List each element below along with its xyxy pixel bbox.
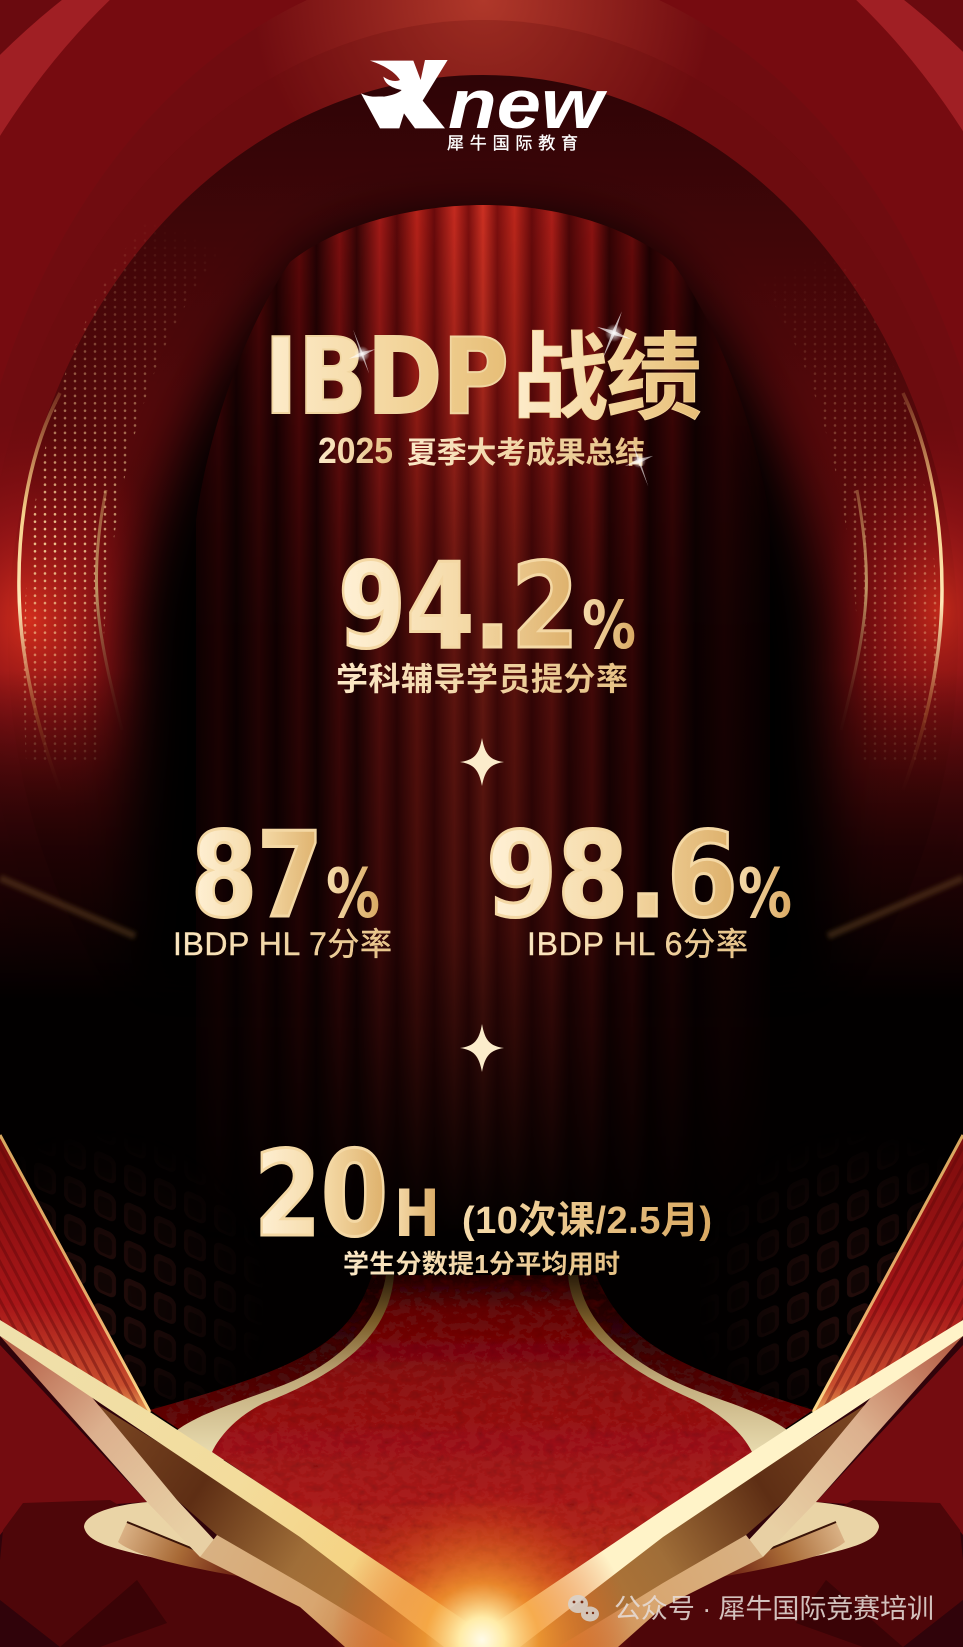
percent sign: % — [582, 587, 636, 664]
logo word new: new — [448, 65, 608, 143]
gold ring lines — [19, 393, 942, 790]
gold V frame — [0, 1320, 963, 1647]
subtitle — [318, 430, 645, 471]
logo: Xnew — [361, 60, 608, 153]
title sparkles — [340, 305, 662, 492]
faint side rails — [0, 878, 963, 936]
stat: 98.6% — [486, 806, 792, 962]
label: 公众号 · 犀牛国际竞赛培训 — [614, 1594, 934, 1624]
value: 87 — [191, 806, 323, 944]
stat: 87% — [173, 806, 392, 962]
stage curtain — [130, 205, 832, 1290]
title: IBDP — [264, 316, 509, 438]
subtitle: 2025 — [318, 430, 393, 471]
right stage decoration: seats, red wing, cream frame — [513, 1120, 963, 1647]
unit: H — [394, 1177, 440, 1252]
logo chinese name: 犀牛国际教育 — [447, 134, 578, 153]
note: (10次课/2.5月) — [462, 1200, 712, 1242]
caption: IBDP HL 7分率 — [173, 926, 392, 962]
lower fade to black — [0, 670, 963, 1647]
stat: 94.2% — [336, 537, 636, 697]
value: 20 — [254, 1125, 388, 1263]
percent sign: % — [326, 855, 380, 934]
gold dot fields — [24, 240, 936, 760]
title — [264, 316, 702, 438]
caption: IBDP HL 6分率 — [527, 926, 748, 962]
caption: 学科辅导学员提分率 — [336, 661, 628, 697]
icon: wechat — [568, 1595, 599, 1622]
caption: 学生分数提1分平均用时 — [343, 1249, 620, 1279]
left stage decoration: seats, red wing, cream frame — [0, 1120, 450, 1647]
title: 战绩 — [512, 325, 702, 432]
value: 94.2 — [338, 537, 579, 675]
red carpet — [150, 1275, 813, 1632]
icon: star divider — [460, 1024, 504, 1072]
subtitle: 夏季大考成果总结 — [407, 437, 645, 470]
icon: star divider — [460, 738, 504, 786]
stat: 20H — [254, 1125, 712, 1279]
percent sign: % — [738, 855, 792, 934]
value: 98.6 — [486, 806, 738, 944]
watermark — [568, 1594, 934, 1624]
logo mark — [361, 60, 448, 128]
